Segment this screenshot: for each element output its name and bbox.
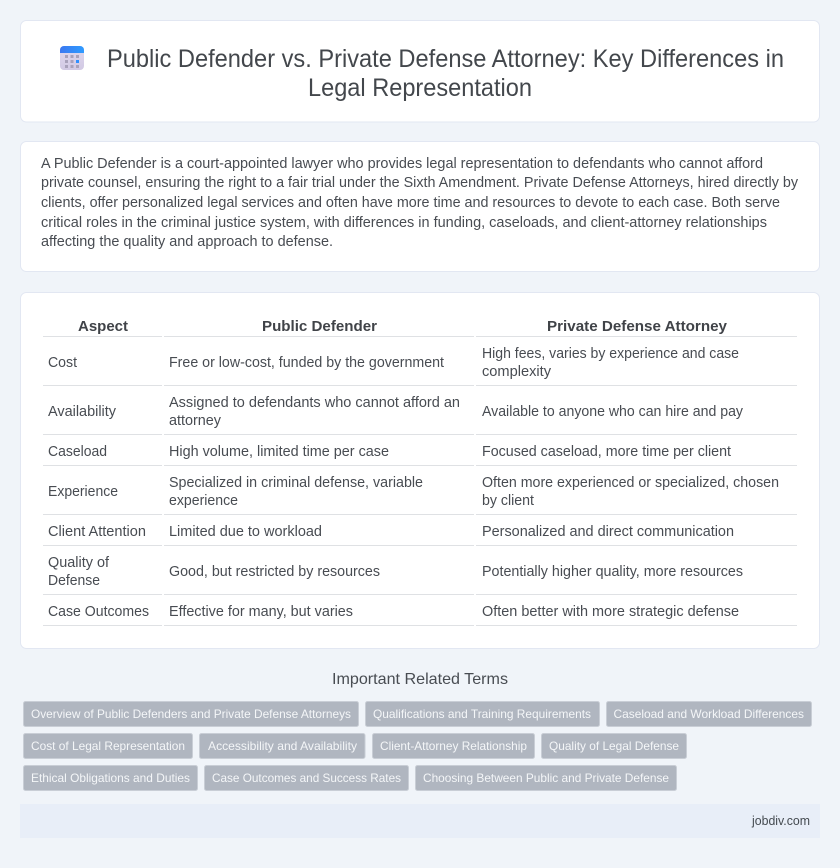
panel: comparison table [20,292,820,648]
table row: case outcomes [43,604,797,626]
tag: accessibility: Accessibility and Availability [208,739,357,753]
table header row: Aspect [78,319,128,335]
title [107,45,784,102]
table row: experience [43,475,797,515]
table row: cost: Free or low-cost, funded by the government [169,355,444,371]
tag: overview: Overview of Public Defenders and Private Defense Attorneys [31,707,351,721]
footer [20,804,820,838]
tag: qualifications: Qualifications and Training Requirements [373,707,591,721]
table row: experience: Specialized in criminal defense, variable [169,475,423,491]
table row: caseload [43,444,797,466]
tag: ethical [24,766,198,790]
table row: cost [43,346,797,386]
table row: cost: complexity [482,364,552,380]
table header row: Private Defense Attorney [547,319,728,335]
table row: quality of defense: Defense [48,573,100,589]
table row: availability [43,395,797,435]
tag: quality: Quality of Legal Defense [549,739,679,753]
table row: client attention [43,524,797,546]
table row: caseload: High volume, limited time per case [169,444,389,460]
tag: qualifications [366,702,600,726]
title: Public Defender vs. Private Defense Attorney: Key Differences in [107,45,784,73]
tag: ethical: Ethical Obligations and Duties [31,771,190,785]
table row: cost: High fees, varies by experience and case [482,346,739,362]
table row: client attention: Limited due to workload [169,524,322,540]
table row: availability: Available to anyone who can hire and pay [482,404,744,420]
table row: caseload: Caseload [48,444,107,460]
tag: choosing [416,766,676,790]
tag: caseload: Caseload and Workload Differences [614,707,804,721]
table row: case outcomes: Effective for many, but varies [169,604,353,620]
table header row: Public Defender [262,319,377,335]
table row: experience: by client [482,493,534,509]
table row: client attention: Personalized and direct communication [482,524,734,540]
panel: introduction [20,142,820,272]
text block: introduction [41,156,799,250]
table row: quality of defense: Good, but restricted by resources [169,564,380,580]
tag: outcomes [204,766,408,790]
text block: introduction: critical roles in the criminal justice system, with differences in funding, caseloads, and client-attorney relationships [41,215,767,231]
title: Legal Representation [308,74,532,102]
panel: related term tags [24,702,812,790]
tag: quality [542,734,686,758]
icon: calendar [60,46,84,70]
text block: introduction: clients, offer personalized legal services and often have more time and resources to devote to each case. Both serve [41,195,780,211]
tag: cost [24,734,192,758]
table row: quality of defense [43,555,797,595]
tag: choosing: Choosing Between Public and Private Defense [423,771,669,785]
table row: availability: Assigned to defendants who cannot afford an [169,395,460,411]
tag: outcomes: Case Outcomes and Success Rates [212,771,401,785]
tag: client-attorney [372,734,534,758]
table row: cost: Cost [48,355,77,371]
tag: cost: Cost of Legal Representation [31,739,185,753]
heading: important related terms: Important Related Terms [332,671,508,688]
table row: experience: Often more experienced or specialized, chosen [482,475,779,491]
table row: availability: Availability [48,404,117,420]
table row: case outcomes: Often better with more strategic defense [482,604,739,620]
text block: introduction: affecting the quality and approach to defense. [41,234,333,250]
tag: overview [24,702,358,726]
table header row [43,319,797,337]
table row: quality of defense: Potentially higher quality, more resources [482,564,743,580]
text block: introduction: A Public Defender is a court-appointed lawyer who provides legal representation to defendants who cannot afford [41,156,763,172]
tag: accessibility [200,734,365,758]
table row: experience: Experience [48,484,118,500]
table row: case outcomes: Case Outcomes [48,604,149,620]
text block: introduction: private counsel, ensuring the right to a fair trial under the Sixth Amendment. Private Defense Attorneys, hired directly by [41,175,799,191]
table row: caseload: Focused caseload, more time per client [482,444,731,460]
tag: caseload [606,702,812,726]
footer source link: jobdiv.com [751,814,810,828]
table row: availability: attorney [169,413,222,429]
table row: client attention: Client Attention [48,524,146,540]
table row: quality of defense: Quality of [48,555,110,571]
tag: client-attorney: Client-Attorney Relationship [380,739,527,753]
table row: experience: experience [169,493,238,509]
panel: header [20,20,820,122]
